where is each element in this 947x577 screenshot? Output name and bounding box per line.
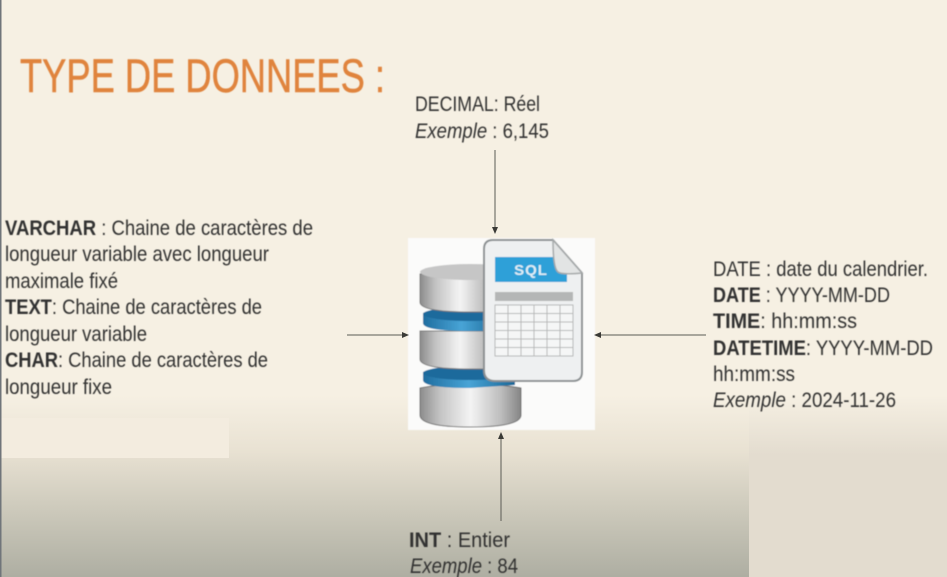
- text block: VARCHAR, TEXT, CHAR: longueur variable: [5, 322, 147, 346]
- text block: DATE, TIME, DATETIME: DATETIME: YYYY-MM-DD: [713, 336, 933, 360]
- text block: INT: [409, 528, 518, 577]
- text block: DATE, TIME, DATETIME: hh:mm:ss: [713, 362, 795, 386]
- title: TYPE DE DONNEES :: [20, 49, 385, 102]
- arrow: from DECIMAL: [492, 150, 498, 234]
- text block: INT: INT : Entier: [409, 528, 510, 552]
- arrow: from VARCHAR: [347, 332, 409, 338]
- arrow: from DATE: [594, 332, 706, 338]
- text block: VARCHAR, TEXT, CHAR: TEXT: Chaine de caractères de: [5, 295, 262, 319]
- text block: DATE, TIME, DATETIME: [713, 257, 933, 412]
- text block: DECIMAL: [415, 92, 549, 143]
- text block: VARCHAR, TEXT, CHAR: CHAR: Chaine de caractères de: [5, 348, 268, 372]
- text block: DATE, TIME, DATETIME: Exemple : 2024-11-26: [713, 388, 896, 412]
- text block: DECIMAL: DECIMAL: Réel: [415, 92, 540, 116]
- text block: VARCHAR, TEXT, CHAR: [5, 216, 313, 399]
- icon: SQL document: [484, 240, 582, 381]
- text block: VARCHAR, TEXT, CHAR: maximale fixé: [5, 269, 118, 293]
- text block: VARCHAR, TEXT, CHAR: longueur fixe: [5, 375, 112, 399]
- text block: DATE, TIME, DATETIME: DATE : YYYY-MM-DD: [713, 283, 890, 307]
- text block: DECIMAL: Exemple : 6,145: [415, 119, 549, 143]
- icon: SQL database: [408, 238, 595, 430]
- text block: VARCHAR, TEXT, CHAR: longueur variable avec longueur: [5, 242, 269, 266]
- icon: database cylinders: [420, 264, 521, 427]
- text block: VARCHAR, TEXT, CHAR: VARCHAR : Chaine de caractères de: [5, 216, 313, 240]
- icon: SQL document: SQL: [514, 262, 548, 279]
- text block: DATE, TIME, DATETIME: TIME: hh:mm:ss: [713, 309, 857, 333]
- arrow: from INT: [498, 432, 504, 521]
